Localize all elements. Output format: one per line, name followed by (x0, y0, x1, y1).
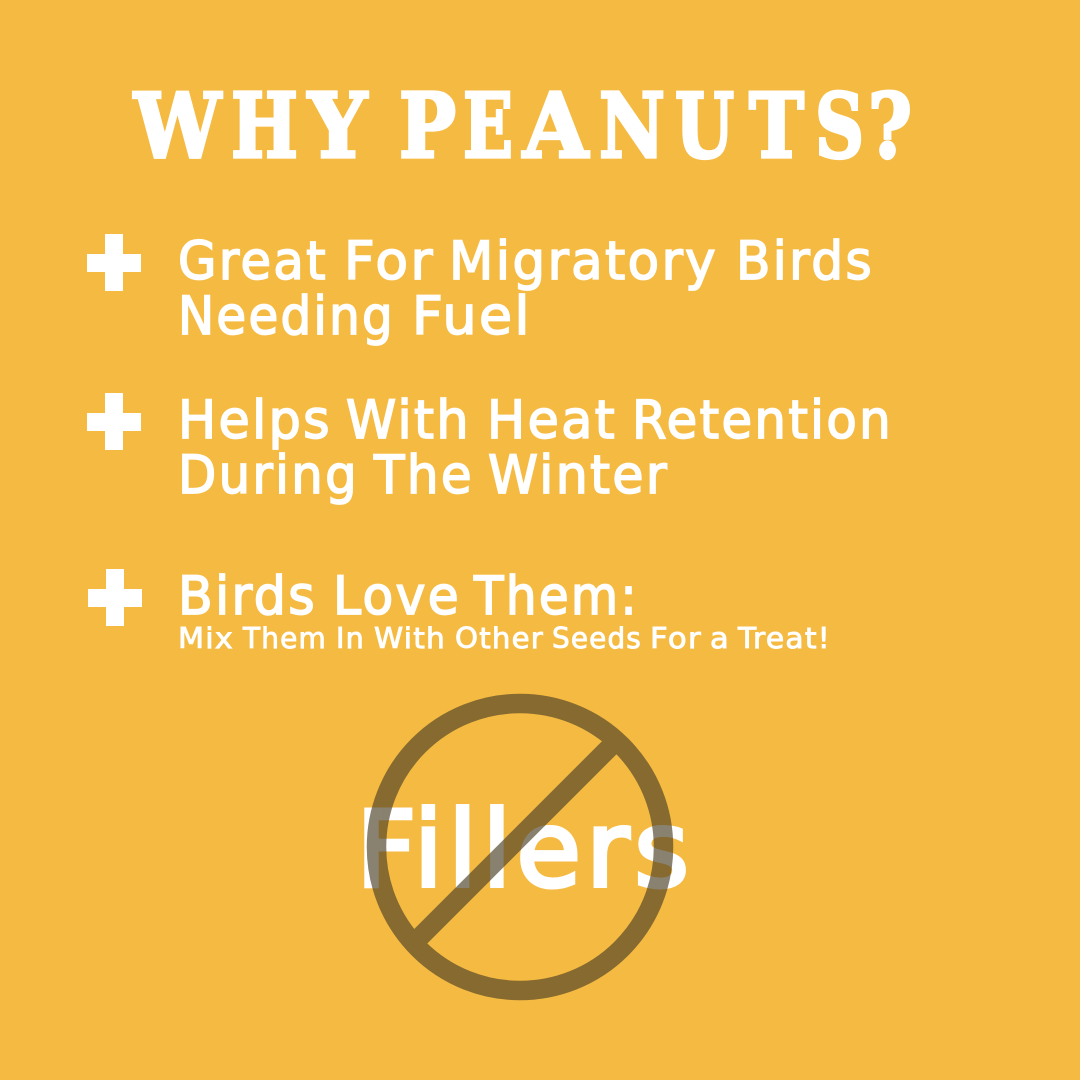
benefit 3 text: Treat! (737, 622, 831, 655)
benefit 3 text: Mix (178, 622, 234, 655)
benefit 3 text: Love (333, 566, 461, 627)
title: P (399, 73, 456, 178)
fillers label: Fillers (356, 789, 694, 911)
title: T (749, 73, 804, 178)
title: Y (307, 73, 368, 178)
icon: prohibition sign (376, 704, 664, 990)
benefit 1 text: Needing (178, 286, 395, 347)
benefit 3 text: For (650, 622, 702, 655)
benefit 3 text: a (710, 622, 730, 655)
title: A (522, 73, 590, 178)
benefit 2 text: Heat (487, 390, 617, 451)
benefit 2 (87, 390, 893, 506)
benefit 3 text: Them (242, 622, 327, 655)
title: E (463, 73, 513, 178)
benefit 1 text: Migratory (449, 231, 718, 292)
benefit 2 text: Helps (178, 390, 332, 451)
benefit 3 text: Birds (178, 566, 317, 627)
benefit 1 text: Great (178, 231, 328, 292)
benefit 1 text: Fuel (412, 286, 532, 347)
title: H (231, 73, 298, 178)
benefit 3 text (178, 566, 831, 655)
icon: plus 2 (87, 393, 141, 450)
benefit 3 text: In (336, 622, 365, 655)
benefit 2 text: With (346, 390, 471, 451)
benefit 3 text: With (374, 622, 446, 655)
no fillers graphic (356, 704, 694, 990)
title: S (815, 73, 864, 178)
benefit 3 text: Other (455, 622, 544, 655)
benefit 1 text: For (344, 231, 435, 292)
benefit 1 (87, 231, 874, 347)
title: ? (868, 73, 912, 178)
benefit 3 (88, 566, 831, 655)
benefit 1 text (178, 231, 874, 347)
benefit 2 text (178, 390, 893, 506)
title: U (675, 73, 734, 178)
icon: plus 1 (87, 234, 141, 291)
benefit 2 text: The (373, 445, 474, 506)
benefit 1 text: Birds (736, 231, 874, 292)
title: W (133, 73, 222, 178)
benefit 3 text: Seeds (552, 622, 642, 655)
title: N (599, 73, 665, 178)
benefit 2 text: Retention (632, 390, 893, 451)
icon: plus 3 (88, 569, 142, 626)
benefit 3 text: Them: (473, 566, 639, 627)
benefit 2 text: During (178, 445, 359, 506)
benefit 2 text: Winter (488, 445, 669, 506)
